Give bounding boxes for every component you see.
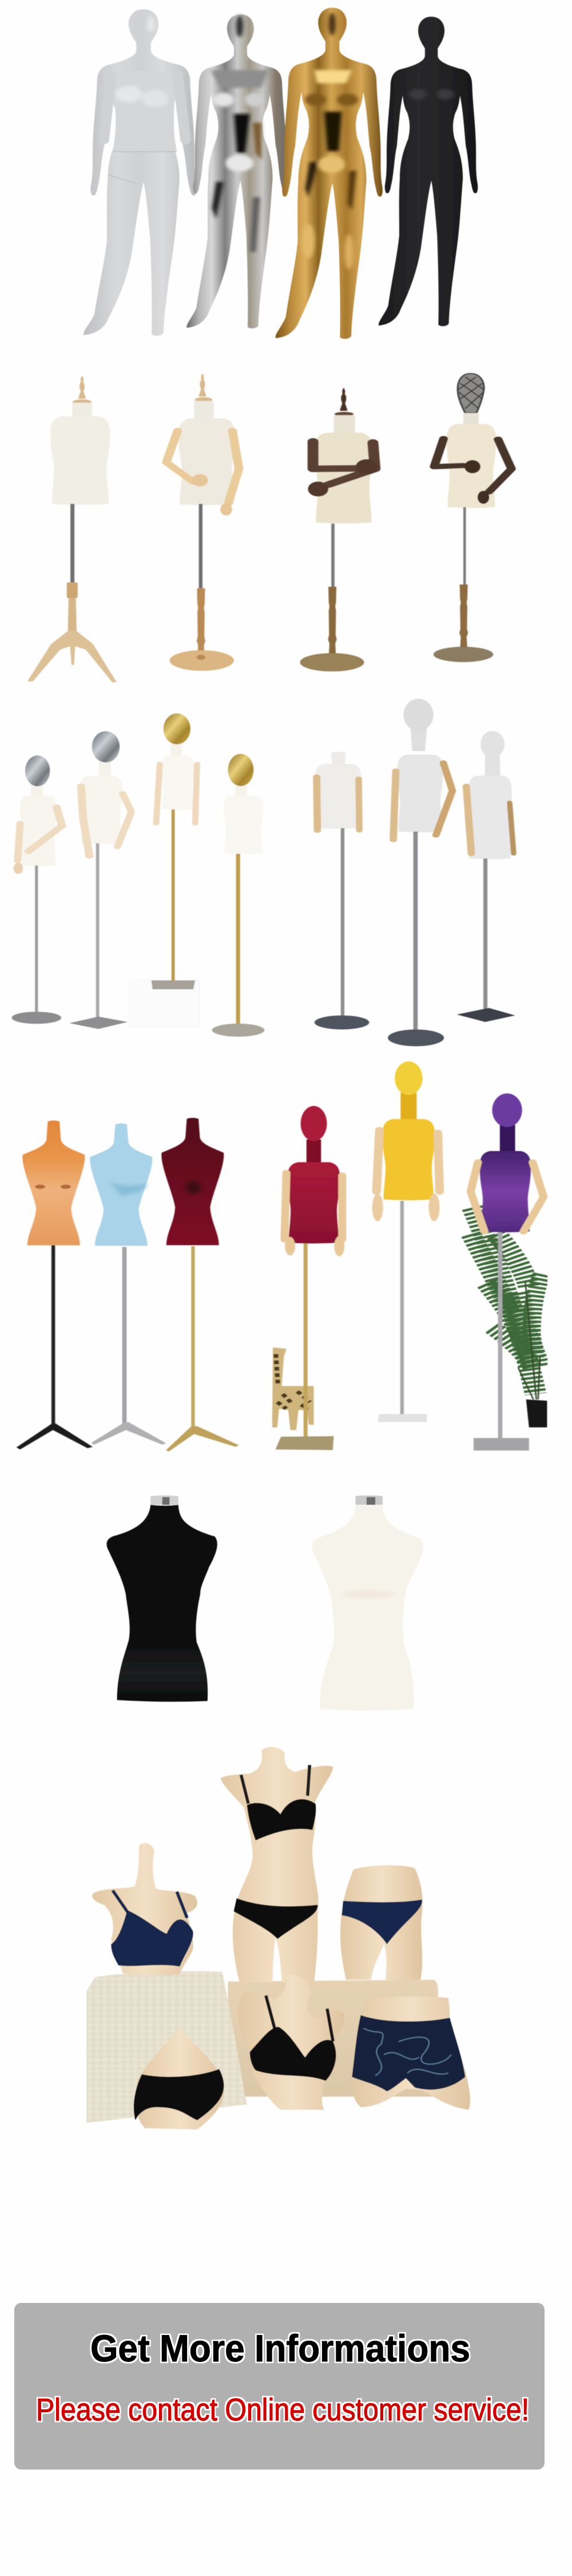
giraffe ornament bbox=[272, 1348, 314, 1430]
form: gold head, armless bbox=[212, 754, 264, 1037]
form: silver head, round base bbox=[11, 756, 62, 1024]
torso: full with black set bbox=[221, 1747, 333, 1982]
panel: four full-body mannequins bbox=[84, 7, 478, 339]
panel: seven white child forms on metal stands bbox=[11, 699, 515, 1046]
dress form: beige with wire cage head bbox=[434, 374, 511, 662]
torso: upper with navy bra bbox=[92, 1843, 197, 1976]
torso: hips with navy brief bbox=[340, 1865, 423, 1981]
plant: potted palm bbox=[471, 1197, 570, 1431]
torso: pelvis with black brief bbox=[134, 2028, 224, 2129]
bust: black bbox=[106, 1495, 217, 1702]
form: silver head, square base bbox=[69, 731, 132, 1029]
dress form: white with tripod bbox=[27, 376, 117, 682]
dress form: purple velvet with wood arms bbox=[471, 1093, 543, 1451]
torso: hips with patterned boxers bbox=[352, 1996, 470, 2110]
banner background bbox=[14, 2303, 545, 2470]
display box bbox=[228, 1980, 438, 2097]
heading: get more informations: Get More Informations bbox=[90, 2327, 470, 2369]
form: tall grey-white with head bbox=[388, 699, 452, 1046]
panel: four child dress forms with wooden stands bbox=[27, 374, 511, 682]
dress form: light blue velvet on silver tripod bbox=[90, 1123, 166, 1445]
dress form: natural linen with light wood arms bbox=[166, 374, 239, 671]
torso: lower center with black bra bbox=[238, 1974, 345, 2110]
panel: six velvet dress forms bbox=[17, 1061, 570, 1452]
dress form: orange velvet on black tripod bbox=[17, 1120, 93, 1449]
mannequin: glossy white bbox=[84, 9, 197, 336]
dress form: yellow velvet with wood arms bbox=[372, 1061, 440, 1422]
panel: black and white bust forms bbox=[106, 1495, 423, 1710]
dress form: maroon velvet on gold tripod bbox=[161, 1118, 239, 1452]
dress form: beige linen with dark wood arms bbox=[300, 388, 378, 671]
callout banner: contact information bbox=[14, 2303, 545, 2470]
dress form: crimson velvet with wood arms and giraffe bbox=[272, 1106, 344, 1450]
mannequin: chrome gold bbox=[276, 7, 383, 339]
lace table cloth bbox=[86, 1971, 247, 2123]
form: grey-white no head bbox=[315, 752, 369, 1029]
panel: lingerie torso display group bbox=[86, 1747, 470, 2129]
mannequin: matte black bbox=[379, 17, 478, 326]
form: gold head on white plinth bbox=[129, 713, 200, 1026]
mannequin: chrome silver bbox=[186, 14, 288, 329]
form: grey-white with head, square base bbox=[457, 731, 515, 1022]
bust: white bbox=[312, 1495, 423, 1710]
